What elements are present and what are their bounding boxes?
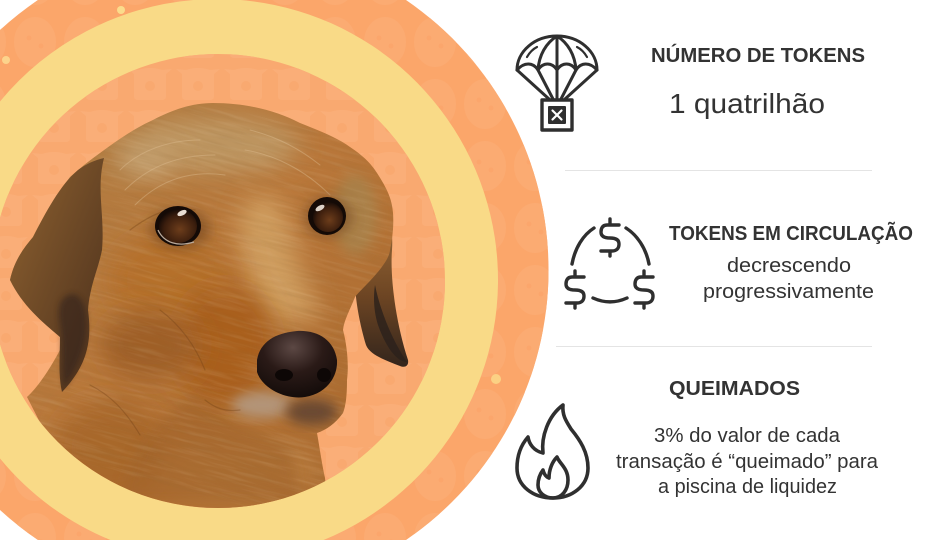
heading: tokens em circulação: TOKENS EM CIRCULAÇÃO [669, 222, 913, 245]
background: outer peach circle [0, 0, 549, 540]
dog portrait [10, 103, 408, 508]
text: queimados description: a piscina de liquidez [658, 476, 837, 498]
dog nose [257, 331, 337, 397]
muzzle shading [232, 392, 338, 425]
icon: flame [517, 405, 588, 498]
heading: queimados: QUEIMADOS [669, 378, 800, 400]
text: queimados description [616, 425, 879, 498]
icon: parachute with crate [517, 36, 597, 130]
heading: número de tokens: NÚMERO DE TOKENS [651, 43, 865, 67]
divider top [565, 170, 872, 171]
divider bottom [556, 346, 872, 347]
fur texture [28, 108, 393, 500]
text: decrescendo progressivamente [703, 255, 874, 303]
dog head and neck [10, 103, 394, 508]
text: decrescendo progressivamente: progressivamente [703, 281, 874, 303]
dog right eye [304, 197, 352, 237]
dog left eye [150, 206, 210, 249]
head highlights [55, 117, 377, 502]
text: queimados description: 3% do valor de cada [654, 425, 841, 447]
dog right ear [356, 236, 408, 367]
yellow ring [0, 0, 498, 540]
text: queimados description: transação é “queimado” para [616, 451, 879, 473]
fur strokes [120, 130, 330, 205]
dog right ear inner [374, 285, 407, 362]
inner peach circle [0, 54, 445, 508]
dog left ear [10, 158, 104, 392]
ear shading [59, 294, 87, 388]
value: 1 quatrilhão: 1 quatrilhão [669, 88, 825, 119]
icon: circulating dollars [566, 219, 653, 308]
text: decrescendo progressivamente: decrescendo [727, 255, 851, 277]
